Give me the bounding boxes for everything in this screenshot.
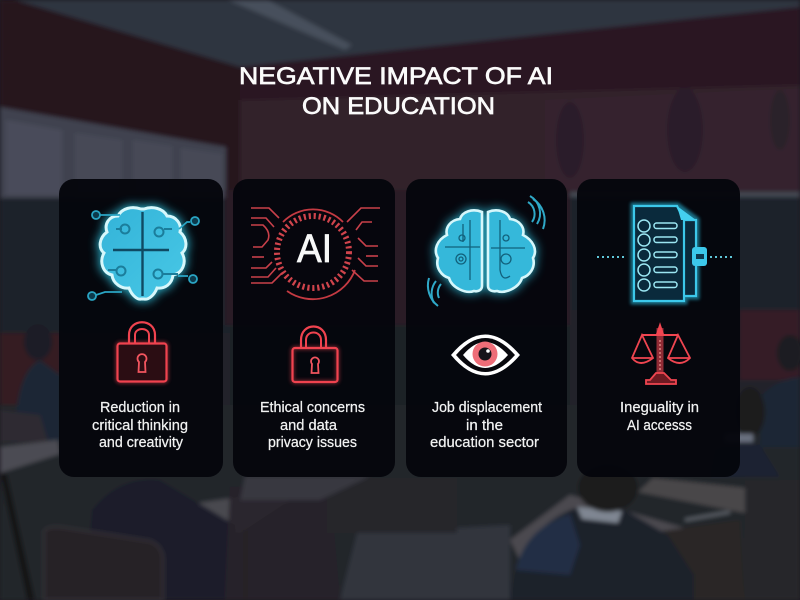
text: inequality in AI access: Ineguality in	[620, 399, 699, 416]
panel: job displacement	[406, 179, 567, 477]
right desks and chair	[638, 478, 765, 513]
text: reduction in critical thinking and creativity: and creativity	[99, 434, 183, 451]
floor	[340, 525, 510, 600]
text: ethical concerns and data privacy issues: Ethical concerns	[260, 399, 365, 416]
icon: glowing document checklist	[597, 206, 734, 301]
right students	[760, 377, 800, 447]
text: reduction in critical thinking and creativity: critical thinking	[92, 417, 188, 434]
text: reduction in critical thinking and creativity	[92, 399, 188, 451]
text: job displacement in the education sector: in the	[466, 417, 503, 434]
panel: reduction in critical thinking	[59, 179, 223, 477]
icon: red balance scales	[632, 325, 690, 384]
right student with hood	[510, 508, 694, 600]
icon: split brain with signal waves	[428, 196, 545, 306]
title: NEGATIVE IMPACT OF AI	[239, 63, 553, 90]
icon: glowing brain with circuit nodes	[88, 208, 199, 300]
panel: inequality in AI access	[577, 179, 740, 477]
text: inequality in AI access	[620, 399, 699, 434]
icon: red padlock	[292, 326, 338, 382]
title: ON EDUCATION	[302, 93, 495, 120]
icon: eye	[451, 334, 520, 376]
text: inequality in AI access: AI accesss	[627, 417, 692, 434]
text: job displacement in the education sector: Job displacement	[432, 399, 543, 416]
icon: red padlock	[118, 322, 166, 382]
title	[239, 63, 553, 120]
icon: AI chip circle with red circuit lines	[251, 208, 380, 299]
front left desk, student, chair	[184, 490, 293, 533]
text: ethical concerns and data privacy issues: and data	[280, 417, 338, 434]
text: ethical concerns and data privacy issues	[260, 399, 365, 451]
left student back row	[24, 324, 52, 360]
text: ethical concerns and data privacy issues: privacy issues	[268, 434, 357, 451]
icon: AI chip circle with red circuit lines: AI	[297, 227, 332, 271]
panel: ethical concerns	[233, 179, 395, 477]
text: job displacement in the education sector: education sector	[430, 434, 539, 451]
text: job displacement in the education sector	[430, 399, 543, 451]
text: reduction in critical thinking and creativity: Reduction in	[100, 399, 180, 416]
